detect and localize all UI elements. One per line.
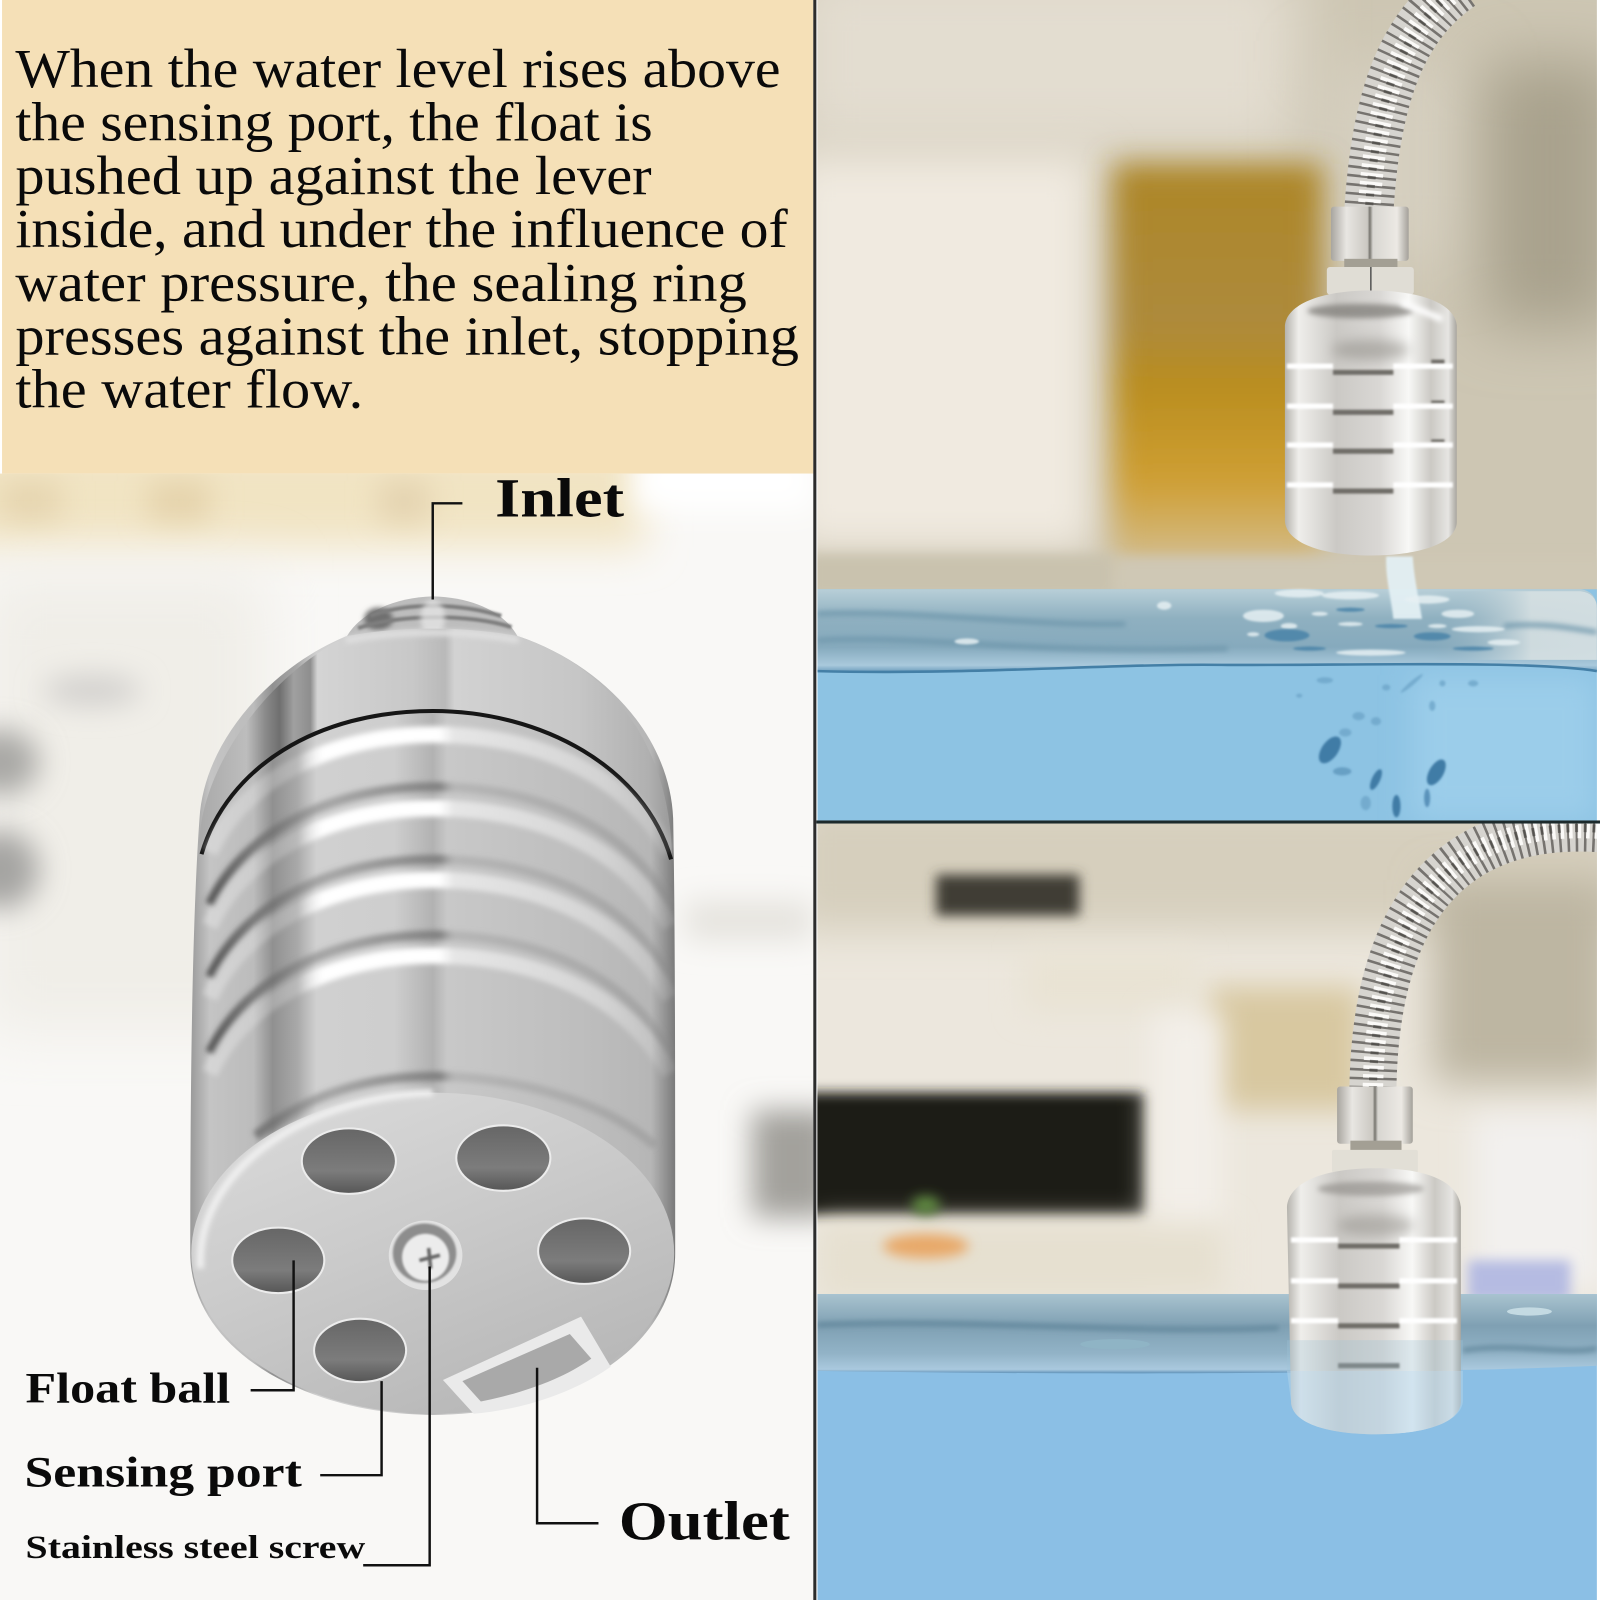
label: Inlet: Inlet <box>495 468 625 529</box>
icon: float bottom face <box>191 1093 674 1414</box>
text block: how the valve works: When the water level rises above <box>15 38 781 99</box>
water tint over submerged float <box>1287 1340 1463 1434</box>
icon: float body <box>1287 1168 1461 1434</box>
divider: horizontal <box>816 820 1600 824</box>
blurred background <box>788 0 1600 614</box>
text block: how the valve works: the water flow. <box>15 359 363 420</box>
icon: float body <box>190 636 675 1415</box>
text block: how the valve works: inside, and under the influence of <box>15 198 788 259</box>
icon: body ribs <box>210 735 670 1146</box>
water body <box>817 589 1597 820</box>
text block: how the valve works: pushed up against the lever <box>15 145 652 206</box>
icon: float top cap <box>199 629 672 859</box>
icon: hex nuts <box>1332 1086 1418 1172</box>
icon: steel hose <box>1369 0 1461 213</box>
text block: how the valve works <box>15 38 799 420</box>
icon: hex nuts <box>1327 207 1414 295</box>
panel: valve closed, float submerged <box>788 798 1600 1600</box>
icon: water jet <box>1386 557 1422 619</box>
icon: stainless steel screw <box>389 1220 462 1290</box>
water body <box>817 1294 1597 1600</box>
blurred kitchen background <box>0 440 834 1600</box>
label: Outlet: Outlet <box>619 1491 790 1552</box>
panel: valve open, water flowing <box>788 0 1600 820</box>
text block: how the valve works: presses against the inlet, stopping <box>15 305 799 366</box>
panel: large float valve close-up <box>0 440 834 1600</box>
leader lines <box>251 503 598 1565</box>
icon: float body <box>1285 291 1457 555</box>
label: Stainless steel screw: Stainless steel screw <box>26 1530 366 1566</box>
divider: vertical <box>813 0 816 1600</box>
icon: threaded inlet stud <box>346 596 519 638</box>
blurred background <box>817 824 1597 1294</box>
icon: rectangular outlet <box>443 1317 611 1414</box>
text block: how the valve works: water pressure, the sealing ring <box>15 252 747 313</box>
icon: splash and bubbles <box>954 589 1520 817</box>
panel: explanation text box <box>2 0 813 474</box>
sealing ring <box>202 711 671 859</box>
text block: how the valve works: the sensing port, the float is <box>15 92 653 153</box>
label: Sensing port: Sensing port <box>25 1449 303 1496</box>
label: Float ball: Float ball <box>26 1366 230 1413</box>
icon: steel hose <box>1373 828 1600 1090</box>
icon: sensing holes <box>232 1125 630 1382</box>
